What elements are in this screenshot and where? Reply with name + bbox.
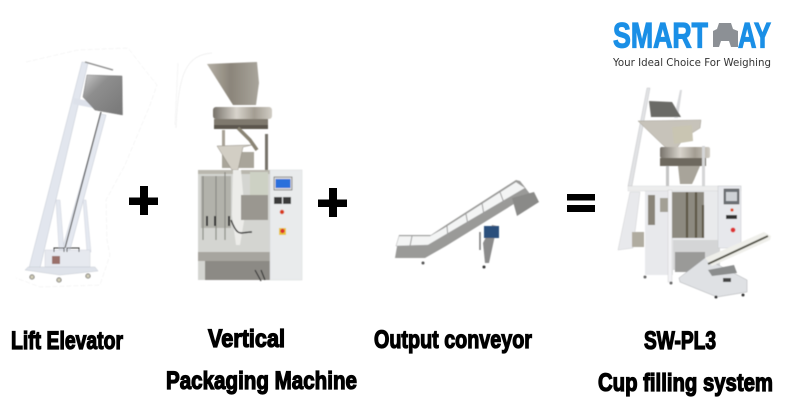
- icon: lift elevator: [16, 48, 178, 287]
- label: vertical: Vertical: [208, 325, 285, 353]
- logo tagline: Your Ideal Choice For Weighing: [612, 56, 771, 69]
- icon: SW-PL3 complete system: [618, 88, 771, 298]
- label: output conveyor: Output conveyor: [374, 326, 532, 354]
- icon: output conveyor: [395, 180, 539, 268]
- logo letters AY: AY: [738, 16, 771, 56]
- label: SW-PL3: SW-PL3: [644, 327, 716, 355]
- icon: plus sign 1: [129, 186, 158, 215]
- icon: equals sign: [567, 194, 595, 212]
- label: lift elevator: Lift Elevator: [11, 327, 123, 355]
- logo: Smartway: [612, 16, 771, 69]
- logo letters SMART: SMART: [613, 16, 708, 56]
- logo emblem: [713, 23, 738, 47]
- label: packaging machine: Packaging Machine: [166, 367, 357, 395]
- icon: plus sign 2: [318, 188, 347, 217]
- icon: vertical packaging machine: [176, 53, 302, 281]
